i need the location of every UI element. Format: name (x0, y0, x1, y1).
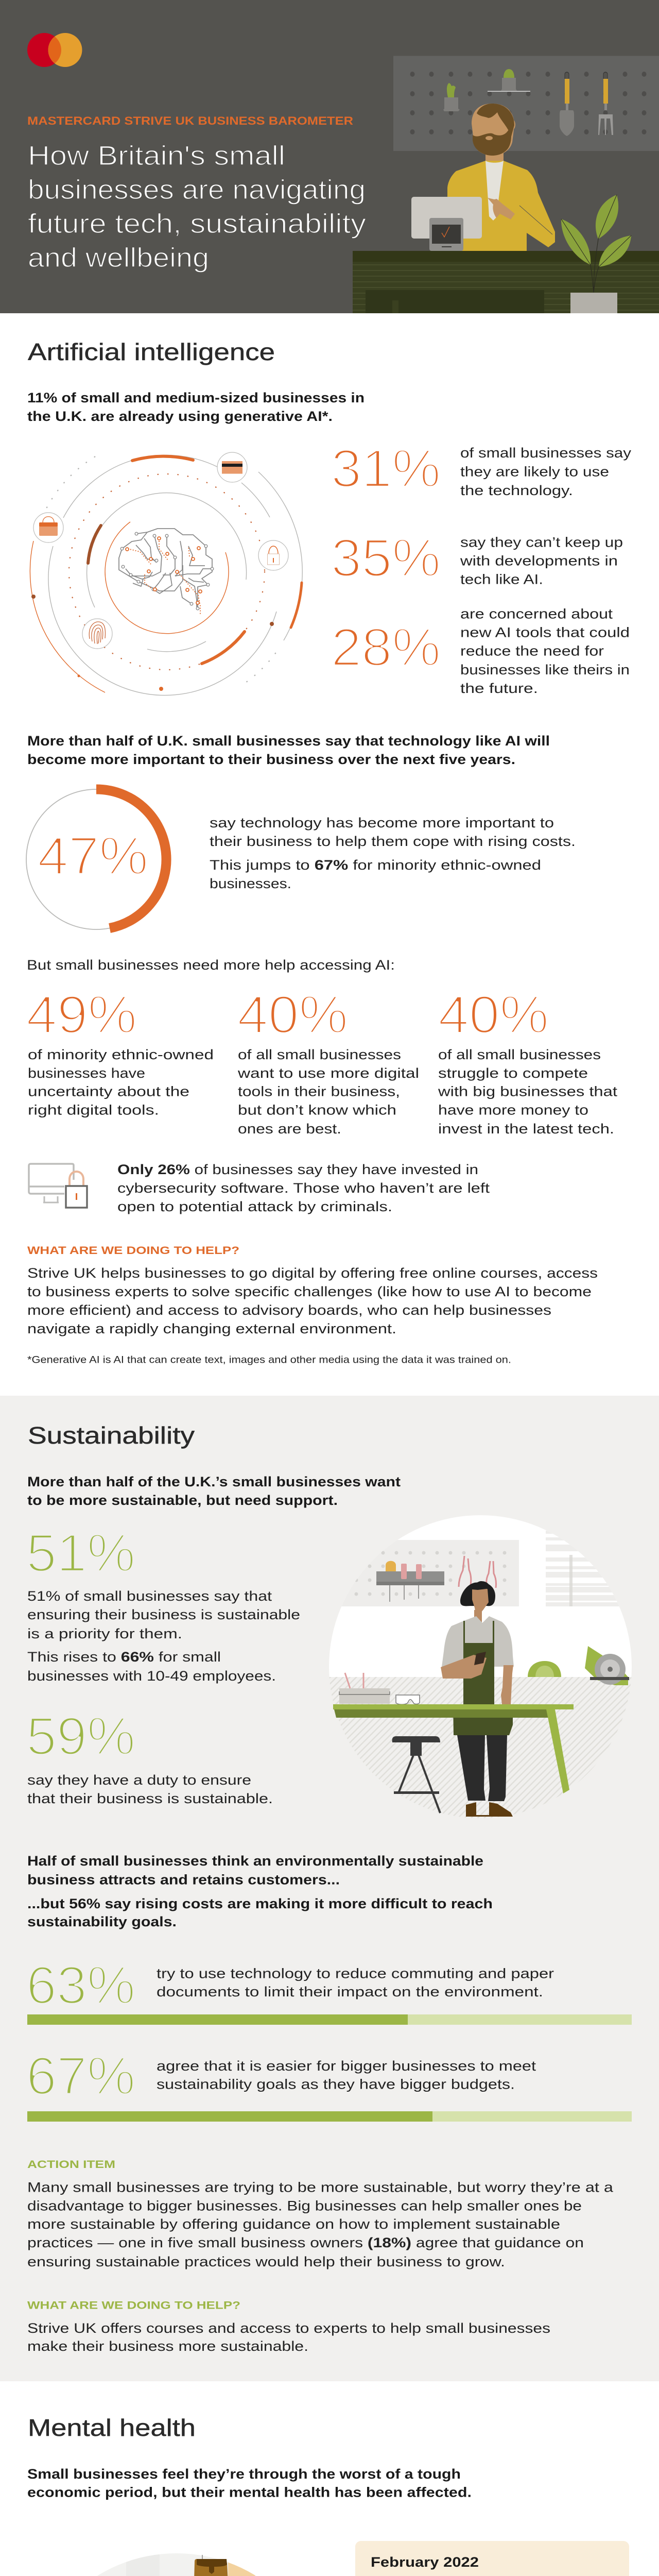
stat: 40% digital tools: want to use more digital (237, 1065, 419, 1081)
diagram: AI brain with orbit rings and icons (30, 452, 302, 696)
stat: 67% with bar: 67% (26, 2046, 135, 2106)
illustration: shopkeeper at counter (353, 56, 659, 313)
stat: 35%: tech like AI. (460, 572, 543, 587)
stat: 40% compete: struggle to compete (438, 1065, 588, 1081)
action item: practices — one in five small business owners (18%) agree that guidance on (27, 2235, 584, 2250)
lede: technology more important (27, 733, 550, 767)
stat: 40% digital tools (237, 985, 419, 1137)
subheading: help accessing AI: But small businesses need more help accessing AI: (27, 957, 395, 973)
stat: 28%: businesses like theirs in (460, 662, 630, 677)
text: 47% explanation: their business to help them cope with rising costs. (210, 834, 576, 849)
title (28, 141, 367, 273)
stat: 40% compete: have more money to (438, 1103, 588, 1118)
stat: 28% (331, 606, 630, 696)
card: February 2022: February 2022 (371, 2554, 479, 2570)
panel: mental health (24, 2414, 636, 2576)
lede: technology more important: More than half of U.K. small businesses say that technology like AI will (27, 733, 550, 749)
stat: 40% digital tools: of all small businesses (238, 1047, 401, 1062)
stat: 40% compete: invest in the latest tech. (438, 1121, 614, 1137)
lede: attracts customers, rising costs: sustainability goals. (27, 1914, 177, 1929)
stat: 40% digital tools: 40% (237, 985, 348, 1045)
lede: attracts customers, rising costs (27, 1853, 493, 1929)
stat: 28%: are concerned about (460, 606, 613, 621)
stat: 59%: that their business is sustainable. (27, 1791, 273, 1806)
stat: 49%: of minority ethnic-owned (28, 1047, 214, 1062)
stat: 31% (331, 439, 632, 499)
title: future tech, sustainability (28, 209, 367, 239)
text: 47% explanation: This jumps to 67% for minority ethnic-owned (210, 857, 541, 873)
stat: 59%: 59% (26, 1706, 135, 1766)
help text: AI: navigate a rapidly changing external environment. (27, 1321, 396, 1336)
lede: tough economic period: economic period, but their mental health has been affected. (27, 2484, 472, 2500)
stat: 40% digital tools: tools in their business, (238, 1084, 400, 1099)
action item: Many small businesses are trying to be more sustainable, but worry they’re at a (27, 2179, 614, 2195)
action item: disadvantage to bigger businesses. Big businesses can help smaller ones be (27, 2198, 582, 2213)
title: and wellbeing (28, 243, 209, 273)
stat: 63% with bar: try to use technology to reduce commuting and paper (157, 1966, 554, 1981)
stat: 40% compete: of all small businesses (438, 1047, 601, 1062)
action item (27, 2159, 614, 2269)
text: 47% explanation: say technology has become more important to (210, 815, 554, 831)
panel: sustainability (0, 1396, 659, 2381)
lede: technology more important: become more important to their business over the next five years. (27, 752, 515, 767)
stat: 28%: 28% (331, 618, 441, 677)
help text: AI: Strive UK helps businesses to go digital by offering free online courses, access (27, 1265, 598, 1281)
text: 47% explanation (210, 815, 576, 891)
lede: want to be more sustainable (27, 1474, 401, 1508)
lede: attracts customers, rising costs: Half of small businesses think an environmentally sustainable (27, 1853, 483, 1869)
illustration: workshop woman at bench (329, 1515, 633, 1821)
text: 26% cybersecurity: open to potential attack by criminals. (117, 1199, 392, 1214)
icon: shopping bag (33, 513, 63, 543)
help text: AI: more efficient) and access to advisory boards, who can help businesses (27, 1302, 551, 1318)
panel: artificial intelligence (26, 338, 632, 1365)
help text: AI (27, 1265, 598, 1336)
stat: 28%: new AI tools that could (460, 624, 630, 640)
text: 47% explanation: businesses. (210, 876, 291, 891)
icon: payment card (217, 452, 247, 482)
stat: 67% with bar: sustainability goals as they have bigger budgets. (157, 2076, 515, 2092)
action item: ensuring sustainable practices would help their business to grow. (27, 2254, 505, 2269)
header kicker: MASTERCARD STRIVE UK BUSINESS BAROMETER (27, 114, 353, 127)
stat: 63% with bar: documents to limit their impact on the environment. (157, 1984, 543, 1999)
lede: tough economic period: Small businesses feel they’re through the worst of a tough (27, 2466, 461, 2482)
stat: 49% (26, 985, 214, 1118)
stat: 28%: reduce the need for (460, 643, 604, 658)
text: 26% cybersecurity: cybersecurity software. Those who haven’t are left (117, 1180, 490, 1196)
text: 26% cybersecurity (117, 1162, 490, 1214)
stat: 40% digital tools: ones are best. (238, 1121, 341, 1137)
stat: 51%: ensuring their business is sustainable (27, 1607, 300, 1622)
stat: 35% (331, 529, 623, 588)
stat: 35%: with developments in (460, 553, 618, 569)
stat: 49%: uncertainty about the (28, 1084, 189, 1099)
lede: want to be more sustainable: More than half of the U.K.’s small businesses want (27, 1474, 401, 1489)
stat: 63% with bar: 63% (26, 1956, 135, 2015)
stat: 59%: say they have a duty to ensure (27, 1772, 251, 1788)
icon: fingerprint (82, 619, 112, 649)
stat: 51%: 51% (26, 1523, 135, 1583)
stat: 51%: This rises to 66% for small (27, 1649, 221, 1665)
heading: artificial intelligence: Artificial intelligence (28, 338, 275, 365)
stat: 51%: 51% of small businesses say that (27, 1588, 272, 1604)
illustration: woman on stool in shop (97, 2553, 256, 2576)
lede: 11% using generative AI (27, 390, 365, 424)
footnote: *Generative AI is AI that can create text, images and other media using the data it was trained on. (27, 1354, 511, 1365)
stat: 31%: they are likely to use (460, 464, 609, 479)
chart: 47% donut (26, 789, 166, 929)
stat: 31%: of small businesses say (460, 445, 632, 461)
action item: more sustainable by offering guidance on how to implement sustainable (27, 2216, 560, 2232)
card: February 2022 (355, 2541, 629, 2576)
stat: 35%: say they can’t keep up (460, 535, 623, 550)
help: sustainability: WHAT ARE WE DOING TO HELP? (27, 2300, 240, 2311)
stat: 51%: businesses with 10-49 employees. (27, 1668, 276, 1684)
lede: attracts customers, rising costs: business attracts and retains customers... (27, 1872, 340, 1888)
heading: mental health: Mental health (28, 2414, 196, 2441)
stat: 63% with bar (26, 1956, 632, 2025)
stat: 40% compete: with big businesses that (438, 1084, 618, 1099)
stat: 35%: 35% (331, 529, 441, 588)
stat: 59% (26, 1706, 273, 1806)
stat: 40% compete (438, 985, 618, 1137)
stat: 31%: 31% (331, 439, 441, 499)
help heading: AI: WHAT ARE WE DOING TO HELP? (27, 1245, 239, 1257)
stat: 49%: businesses have (28, 1065, 145, 1081)
stat: 40% digital tools: but don’t know which (238, 1103, 396, 1118)
text: 26% cybersecurity: Only 26% of businesses say they have invested in (117, 1162, 478, 1177)
stat: 67% with bar: agree that it is easier for bigger businesses to meet (157, 2058, 536, 2074)
lede: want to be more sustainable: to be more sustainable, but need support. (27, 1493, 338, 1508)
chart: 47% donut: 47% (38, 826, 148, 886)
heading: sustainability: Sustainability (28, 1422, 195, 1449)
stat: 67% with bar (26, 2046, 632, 2122)
title: How Britain's small (28, 141, 285, 171)
help: sustainability (27, 2300, 550, 2354)
action item: ACTION ITEM (27, 2159, 115, 2171)
stat: 28%: the future. (460, 681, 538, 696)
stat: 51%: is a priority for them. (27, 1626, 182, 1641)
help text: AI: to business experts to solve specific challenges (like how to use AI to become (27, 1284, 592, 1299)
icon: circuit brain (119, 529, 214, 614)
lede: attracts customers, rising costs: ...but 56% say rising costs are making it more difficult to reach (27, 1896, 493, 1911)
lede: 11% using generative AI: the U.K. are already using generative AI*. (27, 409, 333, 424)
stat: 49%: right digital tools. (28, 1103, 159, 1118)
Mastercard logo (27, 33, 82, 67)
title: businesses are navigating (28, 175, 366, 205)
icon: padlock (258, 540, 288, 570)
header panel (0, 0, 659, 313)
help: sustainability: Strive UK offers courses and access to experts to help small businesses (27, 2320, 550, 2336)
icon: monitor with padlock (29, 1164, 87, 1208)
lede: 11% using generative AI: 11% of small and medium-sized businesses in (27, 390, 365, 405)
stat: 40% compete: 40% (438, 985, 549, 1045)
stat: 31%: the technology. (460, 483, 573, 498)
stat: 51% (26, 1523, 300, 1684)
help: sustainability: make their business more sustainable. (27, 2338, 308, 2354)
lede: tough economic period (27, 2466, 472, 2500)
stat: 49%: 49% (26, 985, 137, 1045)
